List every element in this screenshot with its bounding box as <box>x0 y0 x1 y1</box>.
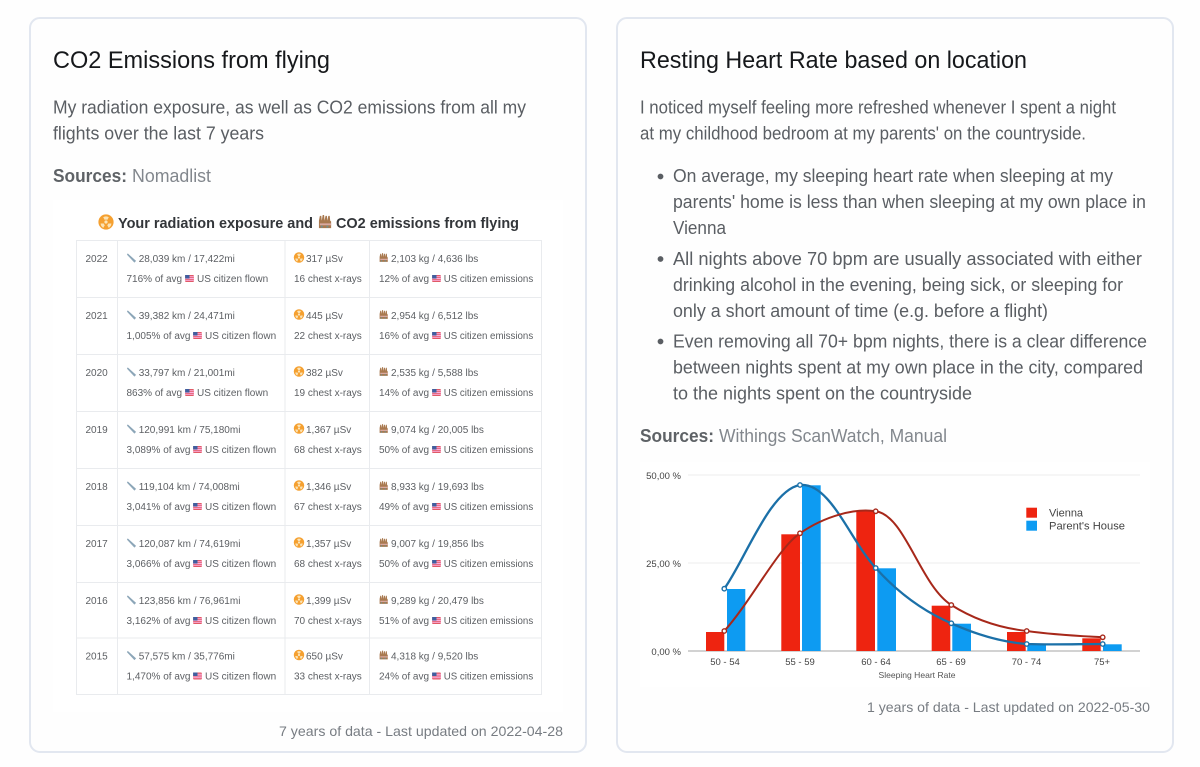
row 2018: US citizen flown <box>205 502 276 513</box>
row 2021: US citizen emissions <box>444 331 533 342</box>
row 2021: 2021 <box>86 311 108 322</box>
row 2022: 317 µSv <box>306 254 343 265</box>
row 2019 <box>86 423 533 456</box>
row 2016: 3,162% of avg <box>126 616 190 627</box>
bullet list: drinking alcohol in the evening, being sick, or sleeping for <box>673 275 1123 295</box>
row 2019: US citizen flown <box>205 445 276 456</box>
y axis labels <box>646 471 682 658</box>
row 2022: 16 chest x-rays <box>294 274 362 285</box>
row 2015: 2015 <box>86 652 108 662</box>
row 2016: 70 chest x-rays <box>294 616 362 627</box>
blue bars: Parent's House <box>727 485 1122 651</box>
heading: CO2 emissions: CO2 Emissions from flying <box>53 47 330 74</box>
bullet list: On average, my sleeping heart rate when sleeping at my <box>673 166 1113 186</box>
row 2019: 3,089% of avg <box>126 445 190 456</box>
row 2021: 1,005% of avg <box>126 331 190 342</box>
panel: resting heart rate <box>617 18 1173 752</box>
y axis labels: 25,00 % <box>646 559 682 570</box>
row 2015: US citizen flown <box>205 672 276 682</box>
row 2022: US citizen emissions <box>444 274 533 285</box>
x axis labels: 50 - 54 <box>710 657 740 668</box>
row 2016: 1,399 µSv <box>306 596 351 607</box>
row 2016: US citizen emissions <box>444 616 533 627</box>
row 2018: 67 chest x-rays <box>294 502 362 513</box>
row 2017: 120,087 km / 74,619mi <box>139 539 240 550</box>
bullet list: to the nights spent on the countryside <box>673 384 972 404</box>
row 2017: US citizen flown <box>205 559 276 570</box>
row 2017: 50% of avg <box>379 559 429 570</box>
legend: Vienna <box>1049 508 1084 520</box>
table heading: Your radiation exposure and <box>118 215 313 232</box>
text block: CO2 description <box>53 98 526 144</box>
row 2018: 119,104 km / 74,008mi <box>139 482 240 493</box>
legend <box>1026 508 1125 532</box>
x axis labels: 60 - 64 <box>861 657 891 668</box>
row 2021: US citizen flown <box>205 331 276 342</box>
sources: Nomadlist: Sources: <box>53 166 127 186</box>
row 2018: 8,933 kg / 19,693 lbs <box>391 482 484 493</box>
row 2019: 1,367 µSv <box>306 425 351 436</box>
red trend line <box>722 509 1105 640</box>
row 2015: 1,470% of avg <box>126 672 190 682</box>
text block: heart rate description: at my childhood bedroom at my parents' on the countryside. <box>640 124 1086 144</box>
row 2022: 2022 <box>86 254 108 265</box>
sources: Withings ScanWatch, Manual: Withings ScanWatch, Manual <box>719 426 947 446</box>
sources: Withings ScanWatch, Manual: Sources: <box>640 426 714 446</box>
row 2022: 28,039 km / 17,422mi <box>139 254 235 265</box>
row 2021: 22 chest x-rays <box>294 331 362 342</box>
text block: heart rate description <box>640 98 1116 144</box>
row 2020: 2,535 kg / 5,588 lbs <box>391 368 478 379</box>
table image: radiation and CO2 by year <box>53 200 563 712</box>
chart: sleeping heart rate distribution <box>640 462 1150 687</box>
row 2017: 9,007 kg / 19,856 lbs <box>391 539 484 550</box>
x axis labels <box>710 657 1111 668</box>
row 2021: 2,954 kg / 6,512 lbs <box>391 311 478 322</box>
table heading <box>98 214 519 232</box>
red bars: Vienna <box>706 511 1101 651</box>
x axis labels: 65 - 69 <box>936 657 966 668</box>
text block: heart rate description: I noticed myself feeling more refreshed whenever I spent a night <box>640 98 1116 118</box>
row 2022: US citizen flown <box>197 274 268 285</box>
row 2016: US citizen flown <box>205 616 276 627</box>
row 2016: 123,856 km / 76,961mi <box>139 596 240 607</box>
row 2021: 39,382 km / 24,471mi <box>139 311 235 322</box>
row 2015: 57,575 km / 35,776mi <box>139 652 235 662</box>
row 2020: US citizen emissions <box>444 388 533 399</box>
row 2021: 445 µSv <box>306 311 343 322</box>
row 2022: 12% of avg <box>379 274 429 285</box>
row 2020 <box>86 366 533 399</box>
bullet list: only a short amount of time (e.g. before a flight) <box>673 301 1048 321</box>
footer: left last updated: 7 years of data - Last updated on 2022-04-28 <box>279 723 563 739</box>
row 2020: 382 µSv <box>306 368 343 379</box>
row 2020: 14% of avg <box>379 388 429 399</box>
row 2015: US citizen emissions <box>444 672 533 682</box>
row 2017: 68 chest x-rays <box>294 559 362 570</box>
row 2021 <box>86 309 533 342</box>
y axis labels: 50,00 % <box>646 471 682 482</box>
row 2017: 2017 <box>86 539 108 550</box>
row 2020: 33,797 km / 21,001mi <box>139 368 235 379</box>
row 2019: 50% of avg <box>379 445 429 456</box>
row 2020: US citizen flown <box>197 388 268 399</box>
row 2017 <box>86 537 533 570</box>
bullet list: between nights spent at my own place in the city, compared <box>673 358 1143 378</box>
row 2018: 2018 <box>86 482 108 493</box>
row 2015: 33 chest x-rays <box>294 672 362 682</box>
bullet list <box>658 166 1147 404</box>
sources: Nomadlist <box>53 166 211 186</box>
bullet list: All nights above 70 bpm are usually associated with either <box>673 249 1142 269</box>
row 2016: 2016 <box>86 596 108 607</box>
text block: CO2 description: flights over the last 7 years <box>53 124 264 144</box>
bullet list: Vienna <box>673 218 727 238</box>
row 2021: 16% of avg <box>379 331 429 342</box>
row 2018: 1,346 µSv <box>306 482 351 493</box>
x axis labels: 70 - 74 <box>1012 657 1041 668</box>
row 2019: US citizen emissions <box>444 445 533 456</box>
panel: CO2 emissions from flying <box>30 18 586 752</box>
row 2017: US citizen emissions <box>444 559 533 570</box>
row 2016: 9,289 kg / 20,479 lbs <box>391 596 484 607</box>
blue trend line <box>722 483 1105 646</box>
row 2019: 120,991 km / 75,180mi <box>139 425 240 436</box>
row 2019: 68 chest x-rays <box>294 445 362 456</box>
row 2019: 2019 <box>86 425 108 436</box>
row 2015: 4,318 kg / 9,520 lbs <box>391 652 478 662</box>
row 2016 <box>86 594 533 627</box>
row 2022: 2,103 kg / 4,636 lbs <box>391 254 478 265</box>
row 2022: 716% of avg <box>126 274 182 285</box>
row 2015: 24% of avg <box>379 672 429 682</box>
row 2018: 3,041% of avg <box>126 502 190 513</box>
row 2015 <box>86 650 533 682</box>
x axis title: Sleeping Heart Rate <box>878 670 956 680</box>
legend: Parent's House <box>1049 520 1125 532</box>
row 2019: 9,074 kg / 20,005 lbs <box>391 425 484 436</box>
row 2020: 19 chest x-rays <box>294 388 362 399</box>
row 2020: 2020 <box>86 368 108 379</box>
x axis labels: 55 - 59 <box>785 657 815 668</box>
row 2015: 650 µSv <box>306 652 343 662</box>
footer: right last updated: 1 years of data - Last updated on 2022-05-30 <box>867 699 1150 715</box>
row 2016: 51% of avg <box>379 616 429 627</box>
text block: CO2 description: My radiation exposure, as well as CO2 emissions from all my <box>53 98 526 118</box>
bullet list: parents' home is less than when sleeping at my own place in <box>673 192 1146 212</box>
bullet list: Even removing all 70+ bpm nights, there is a clear difference <box>673 332 1147 352</box>
row 2018 <box>86 480 533 513</box>
row 2017: 3,066% of avg <box>126 559 190 570</box>
heading: resting heart rate: Resting Heart Rate based on location <box>640 47 1027 74</box>
y axis labels: 0,00 % <box>651 647 682 658</box>
table heading: CO2 emissions from flying <box>336 215 519 232</box>
row 2017: 1,357 µSv <box>306 539 351 550</box>
row 2022 <box>86 252 533 285</box>
row 2018: 49% of avg <box>379 502 429 513</box>
row 2018: US citizen emissions <box>444 502 533 513</box>
x axis labels: 75+ <box>1094 657 1111 668</box>
row 2020: 863% of avg <box>126 388 182 399</box>
sources: Nomadlist: Nomadlist <box>132 166 211 186</box>
